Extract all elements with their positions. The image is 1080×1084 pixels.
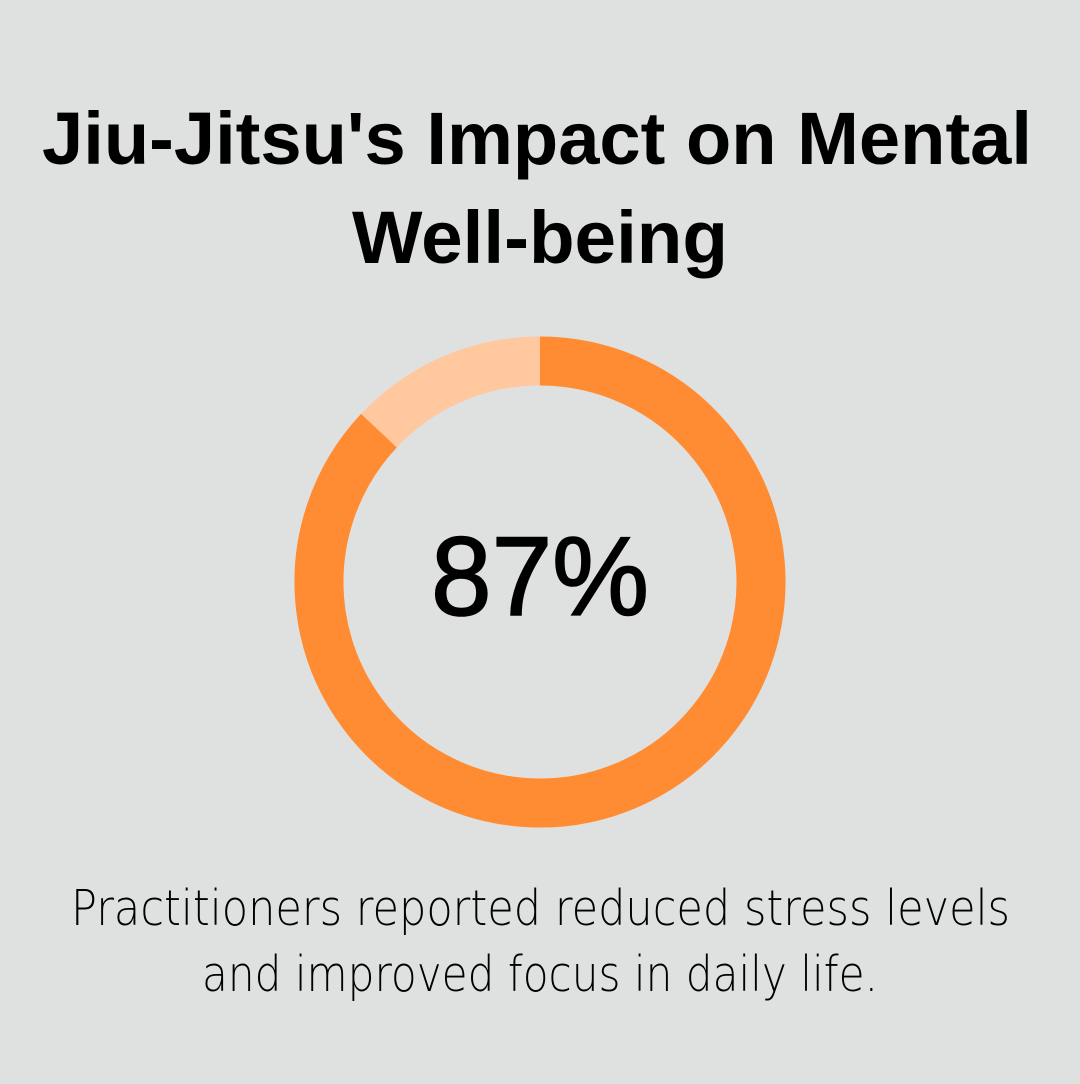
donut chart: 87% [319,361,761,803]
title: Well-being [352,196,728,279]
donut value: 87% [431,514,649,639]
title: Jiu-Jitsu's Impact on Mental [42,97,1032,180]
title [42,97,1032,279]
description text [71,880,1010,1003]
description text: and improved focus in daily life. [202,946,878,1003]
